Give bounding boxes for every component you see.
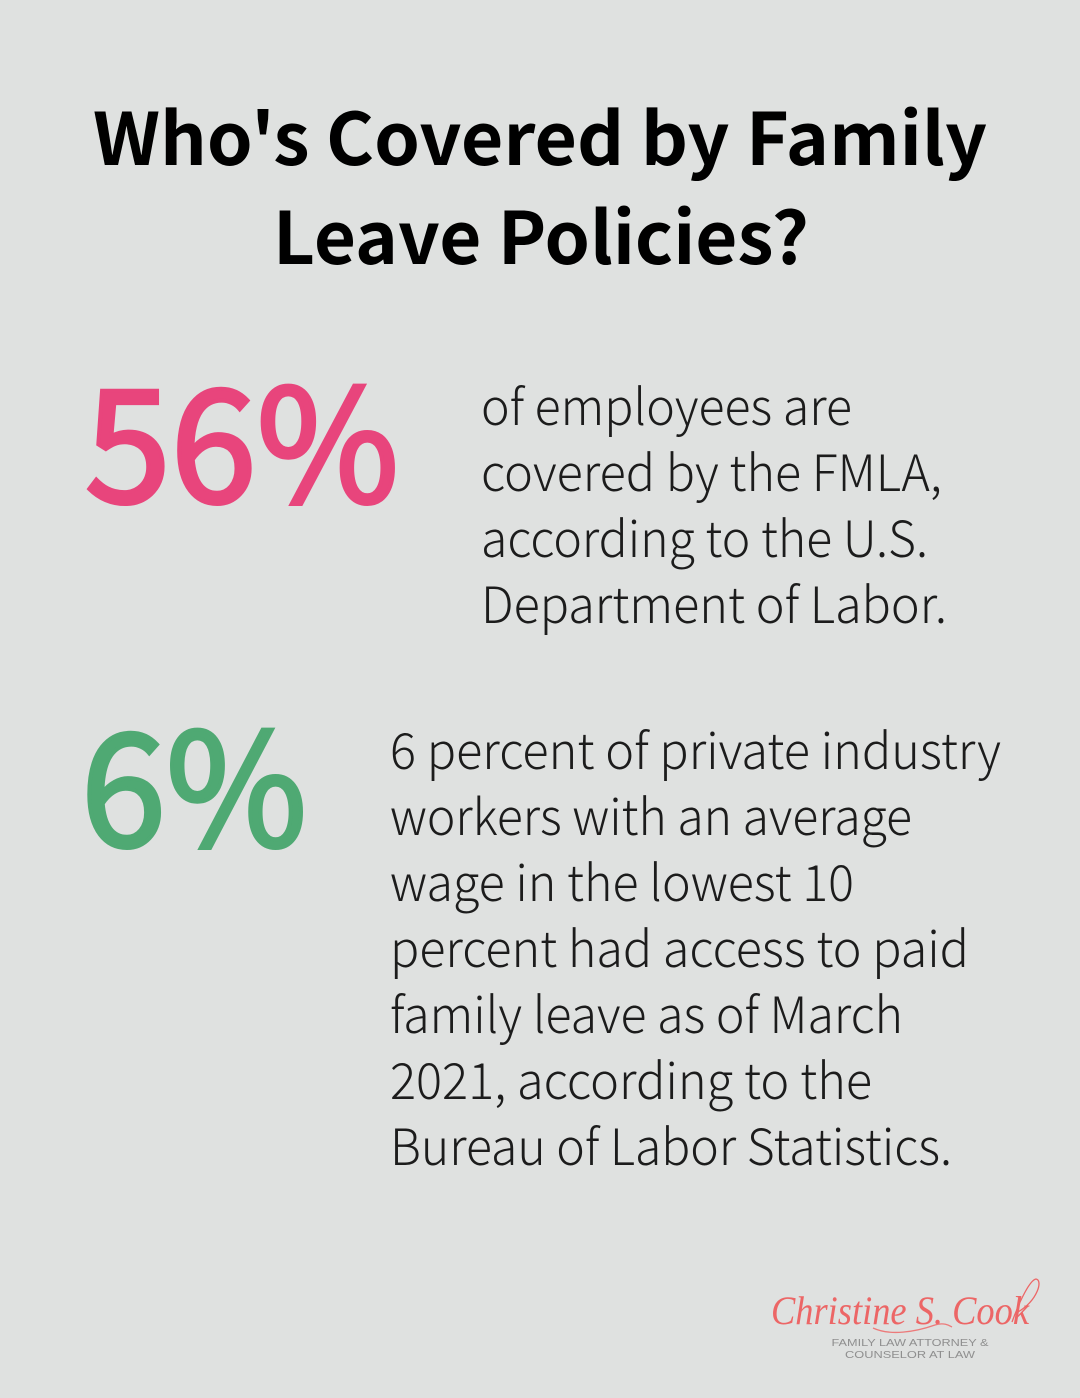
logo: Christine S. Cook: Christine S. Cook [771,1288,1030,1333]
title: Leave Policies? [273,180,809,285]
text block: paid family leave access: 2021, according to the [390,1042,872,1114]
text block: paid family leave access: Bureau of Labor Statistics. [390,1108,952,1180]
text block: FMLA coverage: according to the U.S. [481,500,928,572]
text block: FMLA coverage: covered by the FMLA, [481,434,942,506]
text block: paid family leave access: workers with an average [390,778,912,850]
statistic: 56%: 56% [85,321,399,547]
text block: paid family leave access: wage in the lowest 10 [390,844,854,916]
text block: paid family leave access [390,712,1001,1180]
logo: Christine S. Cook [771,1279,1039,1361]
statistic: 6%: 6% [81,665,307,891]
logo: Christine S. Cook: FAMILY LAW ATTORNEY & [832,1337,988,1349]
title: Who's Covered by Family [93,81,987,186]
logo: Christine S. Cook: COUNSELOR AT LAW [845,1349,975,1361]
text block: paid family leave access: 6 percent of private industry [390,712,1001,784]
text block: paid family leave access: family leave as of March [390,976,903,1048]
text block: FMLA coverage: Department of Labor. [481,566,947,638]
text block: paid family leave access: percent had access to paid [390,910,969,982]
text block: FMLA coverage: of employees are [481,368,852,440]
title [93,81,987,285]
text block: FMLA coverage [481,368,947,638]
